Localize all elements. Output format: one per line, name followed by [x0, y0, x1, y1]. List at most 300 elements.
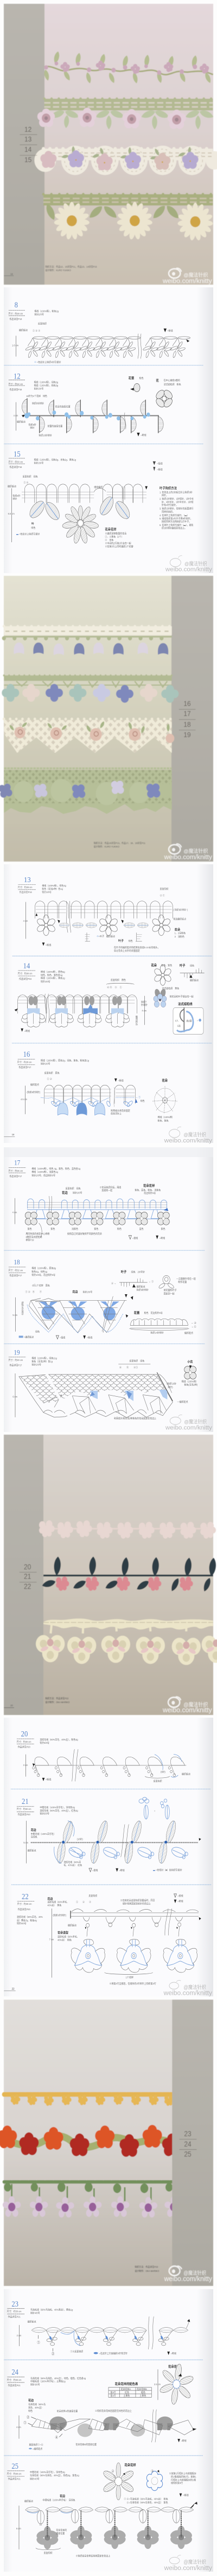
- section 24 flower table and diagram: 土黄色: [123, 2393, 130, 2398]
- section 18 chart: 钩织9针辫针: [137, 1288, 149, 1292]
- section 14 chart: 针辫针: [141, 1003, 148, 1007]
- section 15 chart: ① ②: [23, 480, 29, 485]
- edging 20: pale pink motifs: [39, 1520, 216, 1539]
- panel: photo page with edgings 20 to 22: [4, 1435, 217, 1715]
- section 17 chart: 按照自己的喜好做到不同颜色的花朵: [67, 1231, 103, 1236]
- watermark: weibo.com/knitty: [162, 278, 212, 285]
- edging 24: red and orange flowers on green: [0, 2125, 182, 2157]
- section 16 chart: =断线: [118, 1078, 124, 1082]
- credit text: 设计制作：OKA MARIKO: [135, 2269, 159, 2273]
- section 19 chart: [12, 1359, 198, 1421]
- section 8 heading: 尺寸：约28 cm: [8, 312, 23, 316]
- section 24 flower table and diagram: 2.5 cm: [154, 2383, 161, 2386]
- section 25 flower detail: =断线: [183, 2493, 189, 2497]
- section 12 heading: 棉线（100%棉），绿色2g: [34, 380, 59, 384]
- numbers 16 to 19: 18: [183, 721, 191, 728]
- section 25 flower detail: ※按第1行短针上与前端相对: [169, 2471, 196, 2476]
- section 15 chart: ③ 米色: [105, 538, 114, 542]
- section 17 chart: 花边: [62, 1191, 68, 1195]
- edging 15: green band with daisies: [43, 194, 213, 241]
- section 14 heading: 棉线（100%棉），黄色1g: [41, 976, 65, 980]
- edging 25: green stems and violet flowers: [3, 2182, 183, 2218]
- section 13 lower notes: ⬭=叶子 编织起点: [97, 934, 116, 939]
- right: flower and leaf diagrams with French knot box: 2入: [175, 1019, 179, 1022]
- section 25 flower detail: ①: [113, 2475, 116, 2479]
- section 8 chart: 1.6 cm: [12, 344, 18, 347]
- section 12 chart: 辫针: [30, 426, 35, 430]
- right: flower and leaf diagrams with French knot box: 花朵: [151, 963, 157, 968]
- section 14 chart: 反复钩织 原色: [111, 978, 126, 982]
- section 24 heading: 尺寸：约30 cm: [7, 2378, 22, 2382]
- section 8 heading: 棉线（100%棉），粉色2g: [34, 309, 59, 313]
- section 19 heading: 尺寸：约30 cm: [8, 1358, 23, 1362]
- section 12 chart: 钩织16针辫针: [39, 433, 52, 438]
- section 18 chart: —正面朝外卷在一起: [176, 1277, 196, 1281]
- section 13 heading: 钩针2/0号: [42, 890, 52, 894]
- section 15 chart: 1. 在花边上的2针起立针上钩织9针: [159, 490, 193, 494]
- section 15 chart: 6. 在辫针上钩织引拔针（▬），再钩: [159, 523, 193, 527]
- section 13 lower notes: 穿过花朵上长针的背面固定: [114, 949, 141, 953]
- section 12 chart: 16针为1个花样 绿色: [26, 394, 48, 398]
- section 17 chart: 参照P19: [25, 1238, 34, 1242]
- panel: diagrams 23, 24, 25: [4, 2289, 213, 2572]
- section 19 heading: 19: [14, 1348, 20, 1357]
- section 16 chart: → ①: [136, 1095, 141, 1099]
- section 19 chart: 反复钩织 绿色: [129, 1359, 145, 1363]
- section 21 chart: 5 cm: [23, 1841, 28, 1844]
- section 15 chart: 2. 钩织1针辫针、1针短针、1针中长: [159, 497, 194, 501]
- watermark: weibo.com/knitty: [164, 854, 212, 860]
- section 19 heading: 棉线（100%棉），绿色11g: [31, 1356, 57, 1360]
- section 24 chart: 花朵花样B的连接位置: [75, 2442, 97, 2446]
- section 15 chart: 4. 在辫针上钩织引拔针。（▬）: [159, 513, 189, 517]
- section 16 chart: 编织起点: [30, 1083, 40, 1087]
- section 22 heading: ※在将花朵造型钩织到最后时，同日: [120, 1898, 155, 1903]
- section 18 chart: 叶子: [121, 1270, 127, 1274]
- watermark: @魔法针织: [183, 848, 208, 854]
- section 17 heading: 钩针2/0号，花边钩针6号: [31, 1173, 55, 1178]
- section 19 chart: 利用线头将深浅2种紫色的花朵固定在花边上: [114, 1416, 157, 1421]
- section 23 heading: 23: [11, 2299, 18, 2308]
- section 24 flower table and diagram: 花朵花样A: [121, 2387, 131, 2391]
- section 21 chart: ▬ =在短针（■）处钩织引拔针: [153, 1868, 182, 1872]
- right: flower and leaf diagrams with French knot box: 绕2圈: [186, 1019, 192, 1023]
- edging 14: white scallop lace with flowers: [34, 146, 217, 175]
- section 15 chart: ※在第3行上同时编织2个花瓣: [105, 544, 133, 549]
- section 18 chart: 制作花蕾: [178, 1280, 187, 1284]
- section 25 heading: 尺寸：约30 cm: [7, 2472, 22, 2476]
- section 17 chart: ※花朵钩织好后，用线: [99, 1185, 122, 1190]
- panel: diagrams 17, 18, 19: [4, 1147, 213, 1432]
- section 18 chart: 钩织14针辫针: [150, 1331, 164, 1334]
- section 19 chart: 6 cm: [12, 1395, 17, 1398]
- section 15 chart: =断线: [157, 467, 163, 471]
- section 13 lower notes: =断线: [46, 943, 52, 947]
- section 17 chart: =接线: [132, 1236, 138, 1240]
- watermark: [164, 2266, 212, 2283]
- section 18 chart: ① ② ④ ⑦: [25, 1290, 42, 1294]
- grey side band: [171, 576, 213, 862]
- watermark: weibo.com/knitty: [165, 1424, 213, 1431]
- section 15 chart: ①、②黄色（2个）: [105, 535, 123, 539]
- section 15 chart: =接线: [157, 461, 163, 466]
- page number 20: 20: [10, 1704, 13, 1707]
- section 21 heading: 21: [22, 1797, 29, 1806]
- section 25 heading: 马海毛线（60%马海毛、40%丝），粉色2g、紫色1g: [30, 2474, 79, 2477]
- section 22 chart: [17, 1907, 201, 1986]
- section 22 heading: =接线: [177, 1893, 183, 1898]
- section 13 lower notes: 叶子: [118, 939, 124, 943]
- section 13 heading: 13: [24, 876, 31, 884]
- grey side band: [4, 4, 44, 285]
- section 17 chart: 紫色: [50, 1227, 55, 1230]
- panel: photo page with edgings 16 to 19: [0, 576, 213, 862]
- section 18 heading: 尺寸：约32 cm: [8, 1268, 23, 1273]
- section 25 chart: 花朵花样的: [56, 2528, 67, 2532]
- section 14 heading: 钩针2/0号: [41, 980, 50, 984]
- section 18 chart: 花蕾: [134, 1311, 140, 1315]
- section 22 heading: 40%丝） 黄色: [47, 1903, 62, 1907]
- page number 20: [4, 1704, 14, 1708]
- watermark: [163, 1980, 213, 1997]
- section 8 chart: ① ② ③: [33, 329, 41, 332]
- watermark: [165, 556, 213, 573]
- section 24 heading: 钩针3/0号: [30, 2382, 40, 2387]
- section 13 heading: 棉线（100%棉），绿色4g: [42, 884, 66, 887]
- section 24 flower table and diagram: 花朵花样: [168, 2364, 180, 2369]
- section 13 heading: [18, 876, 66, 894]
- section 20 chart: 反复钩织: [154, 1779, 162, 1783]
- section 22 chart: 作品详见P20: [18, 1907, 30, 1911]
- section 25 flower detail: 行短针上与前端相对的1根: [171, 2478, 196, 2482]
- numbers 23 to 25: 23: [184, 2129, 192, 2138]
- section 15 chart: 同样的钩织。: [162, 510, 175, 513]
- section 18 chart: → ①: [192, 1325, 196, 1329]
- watermark: @魔法针织: [183, 272, 208, 278]
- section 21 heading: 中粗毛线（100%羊仔毛），深绿色3g: [40, 1806, 75, 1809]
- section 18 chart: [12, 1270, 196, 1340]
- grey side band: [173, 2000, 213, 2286]
- section 16 heading: [17, 1050, 90, 1069]
- numbers 12 to 15: 13: [24, 136, 31, 143]
- section 17 chart: 钩针2/0号: [73, 1191, 82, 1195]
- section 20 heading: 20: [21, 1730, 28, 1738]
- section 15 chart: 5. 继续钩织第2片叶子用9针辫针，: [159, 517, 193, 521]
- section 24 chart: =断线: [181, 2439, 187, 2443]
- section 18 chart: 绿色 2/0号针: [131, 1270, 145, 1274]
- section 16 heading: 钩针2/0号: [41, 1062, 50, 1065]
- section 23 heading: [7, 2299, 73, 2319]
- section 15 heading: 钩针2/0号: [34, 461, 43, 465]
- numbers 20 to 22: [20, 1563, 36, 1591]
- section 25 heading: 钩针4/0号: [30, 2477, 40, 2481]
- section 21 heading: 混纺毛线（60%羊毛、40%丝），红色2g: [40, 1809, 78, 1813]
- section 19 heading: 作品详见P17: [9, 1363, 22, 1367]
- section 19 heading: [8, 1348, 57, 1367]
- section 24 flower table and diagram: 橙色: [141, 2391, 146, 2394]
- section 13 heading: 作品详见P16: [20, 890, 32, 894]
- section 16 heading: 作品详见P17: [18, 1065, 31, 1069]
- section 23 heading: 马海毛线（60%马海毛、40%真丝），黄色1g: [30, 2308, 73, 2312]
- page number 16: [4, 273, 14, 276]
- section 17 chart: 花边钩针6号: [144, 1191, 156, 1195]
- section 20 chart: 3 cm: [23, 1764, 28, 1766]
- section 18 chart: =接线: [60, 1335, 66, 1340]
- section 17 chart: 紫色、蓝色、粉色、浅紫色: [135, 1188, 161, 1192]
- section 19 chart: 小花: [187, 1359, 193, 1364]
- section 8 heading: [8, 300, 59, 321]
- credit text: 设计制作：KURO YUKIKO: [45, 268, 72, 272]
- section 8 chart: 编织起点: [19, 328, 28, 332]
- page number 22: [4, 1988, 16, 1991]
- section 25 heading: 25: [11, 2462, 18, 2470]
- section 18 heading: 粉色2g、绿色1g: [31, 1269, 48, 1274]
- section 14 chart: [15, 978, 148, 1033]
- numbers 23 to 25: 25: [184, 2150, 192, 2159]
- section 13 lower notes: 在叶子的编织起点和结束处各留5 cm长的线头，: [114, 946, 159, 949]
- section 24 chart: 花边: [28, 2398, 34, 2402]
- section 18 chart: 钩织8针辫针: [21, 1301, 24, 1316]
- section 22 chart: 钩针5/0号: [17, 1922, 27, 1925]
- section 25 flower detail: ① ②=马海毛线（60%马海毛、40%丝） 粉色: [124, 2497, 168, 2501]
- numbers 16 to 19: [179, 700, 196, 738]
- section 21 chart: (10针): [77, 1837, 83, 1841]
- section 20 chart: =断线: [46, 1777, 52, 1782]
- section 13 chart: ( 钩织9针辫针 ): [173, 908, 188, 911]
- right: flower and leaf diagrams with French knot box: 编织起点: [190, 978, 199, 982]
- section 25 chart: 12: [40, 2523, 42, 2526]
- credit text: 钩织方法：作品12、15详见P11，作品13、14详见P15: [45, 265, 97, 268]
- section 12 heading: 作品详见P16: [9, 388, 22, 391]
- section 16 heading: 棉线（100%棉），原色3g、绿色、紫色、粉色各1g: [41, 1058, 90, 1063]
- section 15 chart: 编织起点: [8, 484, 17, 489]
- panel: diagrams 20, 21, 22: [4, 1718, 213, 1997]
- edging 23: yellow picot: [4, 2094, 174, 2106]
- section 22 heading: 花边: [47, 1897, 53, 1901]
- section 24 chart: =编织起点: [33, 2447, 43, 2451]
- section 23 heading: 钩针4/0号: [30, 2311, 40, 2315]
- section 24 flower table and diagram: 第2行: [110, 2391, 116, 2394]
- section 17 chart: 蓝色: [139, 1227, 144, 1230]
- section 24 heading: 作品详见P21: [8, 2384, 21, 2387]
- watermark: @魔法针织: [183, 2559, 206, 2565]
- section 25 chart: 花边: [60, 2494, 65, 2498]
- section 8 heading: 钩针2/0号: [34, 312, 44, 317]
- right: flower and leaf diagrams with French knot box: →: [196, 1019, 199, 1022]
- credit text: 钩织方法：作品16详见P13，作品17、18、19详见P11: [94, 841, 146, 844]
- section 24 heading: [7, 2368, 86, 2387]
- credit text: [45, 1697, 70, 1704]
- section 17 chart: 粉色: [117, 1227, 122, 1231]
- section 8 chart: ⬭ =在此针上钩织4针引拔针: [34, 360, 61, 364]
- credit text: 设计制作：OKA MARIKO: [45, 1700, 70, 1704]
- edging 22: cream band with pansies: [36, 1618, 217, 1665]
- section 12 heading: 尺寸：约32 cm: [8, 382, 23, 386]
- section 14 chart: =断线: [24, 1029, 30, 1033]
- section 17 chart: 浅紫色: [72, 1227, 79, 1230]
- section 15 heading: 15: [14, 449, 21, 458]
- edging 18: cream triangles with roses: [4, 719, 174, 753]
- edging 16: cream band with bell flowers: [4, 626, 172, 655]
- numbers 20 to 22: 21: [24, 1572, 31, 1581]
- section 12 chart: 花蕾: [129, 376, 135, 381]
- section 22 heading: 22: [22, 1892, 29, 1901]
- right: flower and leaf diagrams with French knot box: 1出: [177, 1024, 181, 1028]
- section 23 chart: ②: [52, 2352, 55, 2356]
- section 13 lower notes: 1、2深粉色: [175, 931, 186, 935]
- section 18 chart: =断线: [87, 1335, 93, 1340]
- section 25 chart: 连接位置: [56, 2532, 65, 2535]
- section 16 chart: 利用线头将花朵固定: [111, 1109, 131, 1113]
- section 15 chart: 3. 钩织1针辫针，在辫针的反面进行: [159, 506, 194, 511]
- section 13 chart: 反复钩织: [160, 887, 169, 890]
- section 25 chart: 6 cm: [16, 2527, 21, 2530]
- section 22 heading: ① ② ③: [76, 1900, 92, 1904]
- section 22 chart: 混纺毛线（60%羊毛、: [58, 1935, 79, 1939]
- section 18 chart: 5 cm: [12, 1314, 17, 1316]
- section 22 chart: 混纺毛线（60%羊毛、40%: [17, 1915, 43, 1919]
- section 22 heading: =断线: [177, 1899, 183, 1903]
- section 22 chart: 丝）黄色7g、粉色4g: [17, 1918, 37, 1922]
- section 15 chart: [8, 461, 194, 549]
- credit text: [45, 265, 97, 272]
- section 22 chart: 1个花样: [126, 1975, 133, 1980]
- panel: photo page with edgings 12 to 15: [4, 4, 217, 285]
- watermark: @魔法针织: [184, 560, 207, 567]
- section 16 chart: [21, 1071, 177, 1123]
- section 16 chart: 在钩浮针上: [111, 1112, 122, 1116]
- section 16 chart: (钩织8针辫针): [27, 1090, 41, 1094]
- section 12 heading: 棉线（100%棉），粉色3g: [34, 383, 59, 387]
- section 15 chart: 针、4针长针、1针中长针、1针短: [162, 500, 194, 504]
- watermark: [164, 844, 212, 860]
- section 24 flower table and diagram: [108, 2363, 194, 2405]
- section 16 heading: 16: [23, 1050, 30, 1058]
- watermark: @魔法针织: [183, 1701, 208, 1708]
- section 8 heading: 作品详见P13: [9, 317, 22, 321]
- grey side band: [4, 1435, 43, 1715]
- section 12 chart: 在中心做绕3圈的: [164, 378, 180, 382]
- section 16 heading: 尺寸：约28 cm: [17, 1060, 32, 1064]
- panel: diagrams 8, 12, 15: [4, 287, 213, 573]
- section 16 chart: 绿色: [141, 1099, 145, 1102]
- section 17 heading: 棉线（100%棉），浅紫色1g: [31, 1170, 58, 1174]
- section 25 chart: 编织起点: [24, 2499, 34, 2503]
- section 14 heading: 绿色、粉色、紫色各1g: [41, 973, 63, 977]
- section 23 chart: ①②反复钩织: [70, 2349, 84, 2354]
- section 8 chart: 反复钩织: [38, 322, 47, 325]
- section 24 heading: 24: [11, 2368, 18, 2376]
- section 24 chart: ②: [27, 2415, 30, 2419]
- section 19 chart: 辫针): [168, 1385, 173, 1389]
- section 17 chart: 用同色系的线在中心绣缠: [25, 1231, 50, 1236]
- section 22 chart: 40%丝） 粉色: [58, 1938, 72, 1942]
- section 23 chart: 2 cm: [17, 2334, 22, 2337]
- section 18 chart: 绿色: [35, 1329, 40, 1333]
- section 24 flower table and diagram: 土黄色: [139, 2393, 146, 2398]
- section 13 heading: 粉色（深浅2种）各1g: [42, 887, 63, 890]
- section 18 chart: ← ②: [192, 1321, 196, 1325]
- section 8 chart: [12, 322, 190, 364]
- numbers 12 to 15: [20, 125, 37, 164]
- edging 17: green band with four petal flowers: [2, 676, 178, 703]
- watermark: weibo.com/knitty: [162, 1706, 212, 1714]
- section 19 heading: 紫色（深浅2种）各1g: [31, 1359, 53, 1364]
- section 18 chart: ② →: [111, 1281, 116, 1286]
- watermark: [162, 1697, 212, 1714]
- section 23 heading: 尺寸：约30 cm: [7, 2309, 22, 2314]
- section 17 heading: 尺寸：约35 cm: [8, 1168, 23, 1173]
- section 20 chart: (8针): [161, 1770, 165, 1774]
- section 17 chart: =断线: [159, 1236, 165, 1240]
- section 16 chart: 花朵: [162, 1078, 168, 1083]
- section 25 flower detail: ③: [151, 2469, 154, 2473]
- section 13 lower notes: 3 浅粉色: [175, 935, 185, 939]
- section 13 chart: 4 cm: [23, 920, 28, 922]
- section 17 heading: 作品详见P17: [9, 1174, 22, 1178]
- section 25 flower detail: [102, 2463, 196, 2504]
- numbers 20 to 22: 22: [24, 1582, 31, 1591]
- section 12 heading: 钩针2/0号: [34, 387, 43, 391]
- section 21 heading: [17, 1797, 78, 1816]
- section 18 chart: 编织起点: [137, 1284, 145, 1288]
- panel: photo page with edgings 23 to 25: [0, 2000, 213, 2286]
- section 22 heading: [17, 1892, 183, 1907]
- numbers 12 to 15: 12: [24, 125, 31, 133]
- section 18 heading: [8, 1258, 56, 1277]
- watermark: @魔法针织: [183, 1131, 206, 1138]
- section 20 heading: 混纺毛线（60%羊毛、40%丝），粉色3g: [40, 1738, 78, 1742]
- panel: diagrams 13, 14, 16: [4, 864, 213, 1144]
- section 12 chart: 钩织8针: [29, 423, 37, 427]
- right: flower and leaf diagrams with French knot box: 将花朵和叶子缝合在一起: [170, 994, 194, 999]
- section 14 chart: 4 cm: [142, 1009, 146, 1012]
- credit text: 钩织方法：作品详见P22: [45, 1697, 69, 1700]
- section 24 chart: 花朵花样A的连接位置: [57, 2409, 78, 2413]
- section 20 chart: [23, 1749, 191, 1783]
- right: flower and leaf diagrams with French knot box: 法式结粒绣: [178, 1002, 193, 1006]
- section 15 chart: 织2针辫针编结到花边上。: [162, 526, 187, 530]
- section 13 chart: 花边编织起点: [173, 917, 186, 920]
- edging 12: vine with pink flowers: [43, 51, 213, 84]
- section 21 chart: =接线: [92, 1868, 98, 1872]
- section 25 chart: 中细毛线（100%羊仔毛） 深绿色: [42, 2498, 75, 2502]
- section 18 chart: 将花蕾和叶子: [164, 1288, 177, 1292]
- section 18 heading: 18: [14, 1258, 20, 1266]
- section 15 chart: 绿色: [31, 525, 36, 529]
- watermark: @魔法针织: [184, 1418, 207, 1424]
- section 19 chart: 棉线（100%棉）: [182, 1379, 198, 1384]
- section 21 chart: 中粗毛线（100%羊仔毛）: [31, 1832, 56, 1836]
- edging 19: green pineapple lace with flowers: [0, 768, 172, 814]
- section 23 heading: 作品详见P21: [8, 2315, 21, 2319]
- section 12 chart: 4 cm: [14, 414, 18, 417]
- section 14 heading: [18, 961, 65, 984]
- section 25 heading: [7, 2462, 79, 2481]
- section 23 chart: [17, 2316, 190, 2356]
- section 12 chart: [14, 376, 181, 438]
- watermark: weibo.com/knitty: [165, 566, 213, 573]
- edging 13: green lattice with pink roses: [37, 99, 214, 130]
- page number 18: 18: [12, 1133, 15, 1136]
- section 12 chart: 法式结粒绣 粉色: [164, 382, 181, 387]
- section 24 chart: ④: [55, 2435, 58, 2440]
- section 16 chart: 4.5 cm: [21, 1098, 27, 1101]
- section 8 chart: =断线: [167, 329, 173, 332]
- section 18 chart: =编织起点: [24, 1335, 34, 1339]
- section 13 chart: ② ①: [160, 894, 165, 897]
- section 22 chart: 花朵造型: [58, 1930, 68, 1935]
